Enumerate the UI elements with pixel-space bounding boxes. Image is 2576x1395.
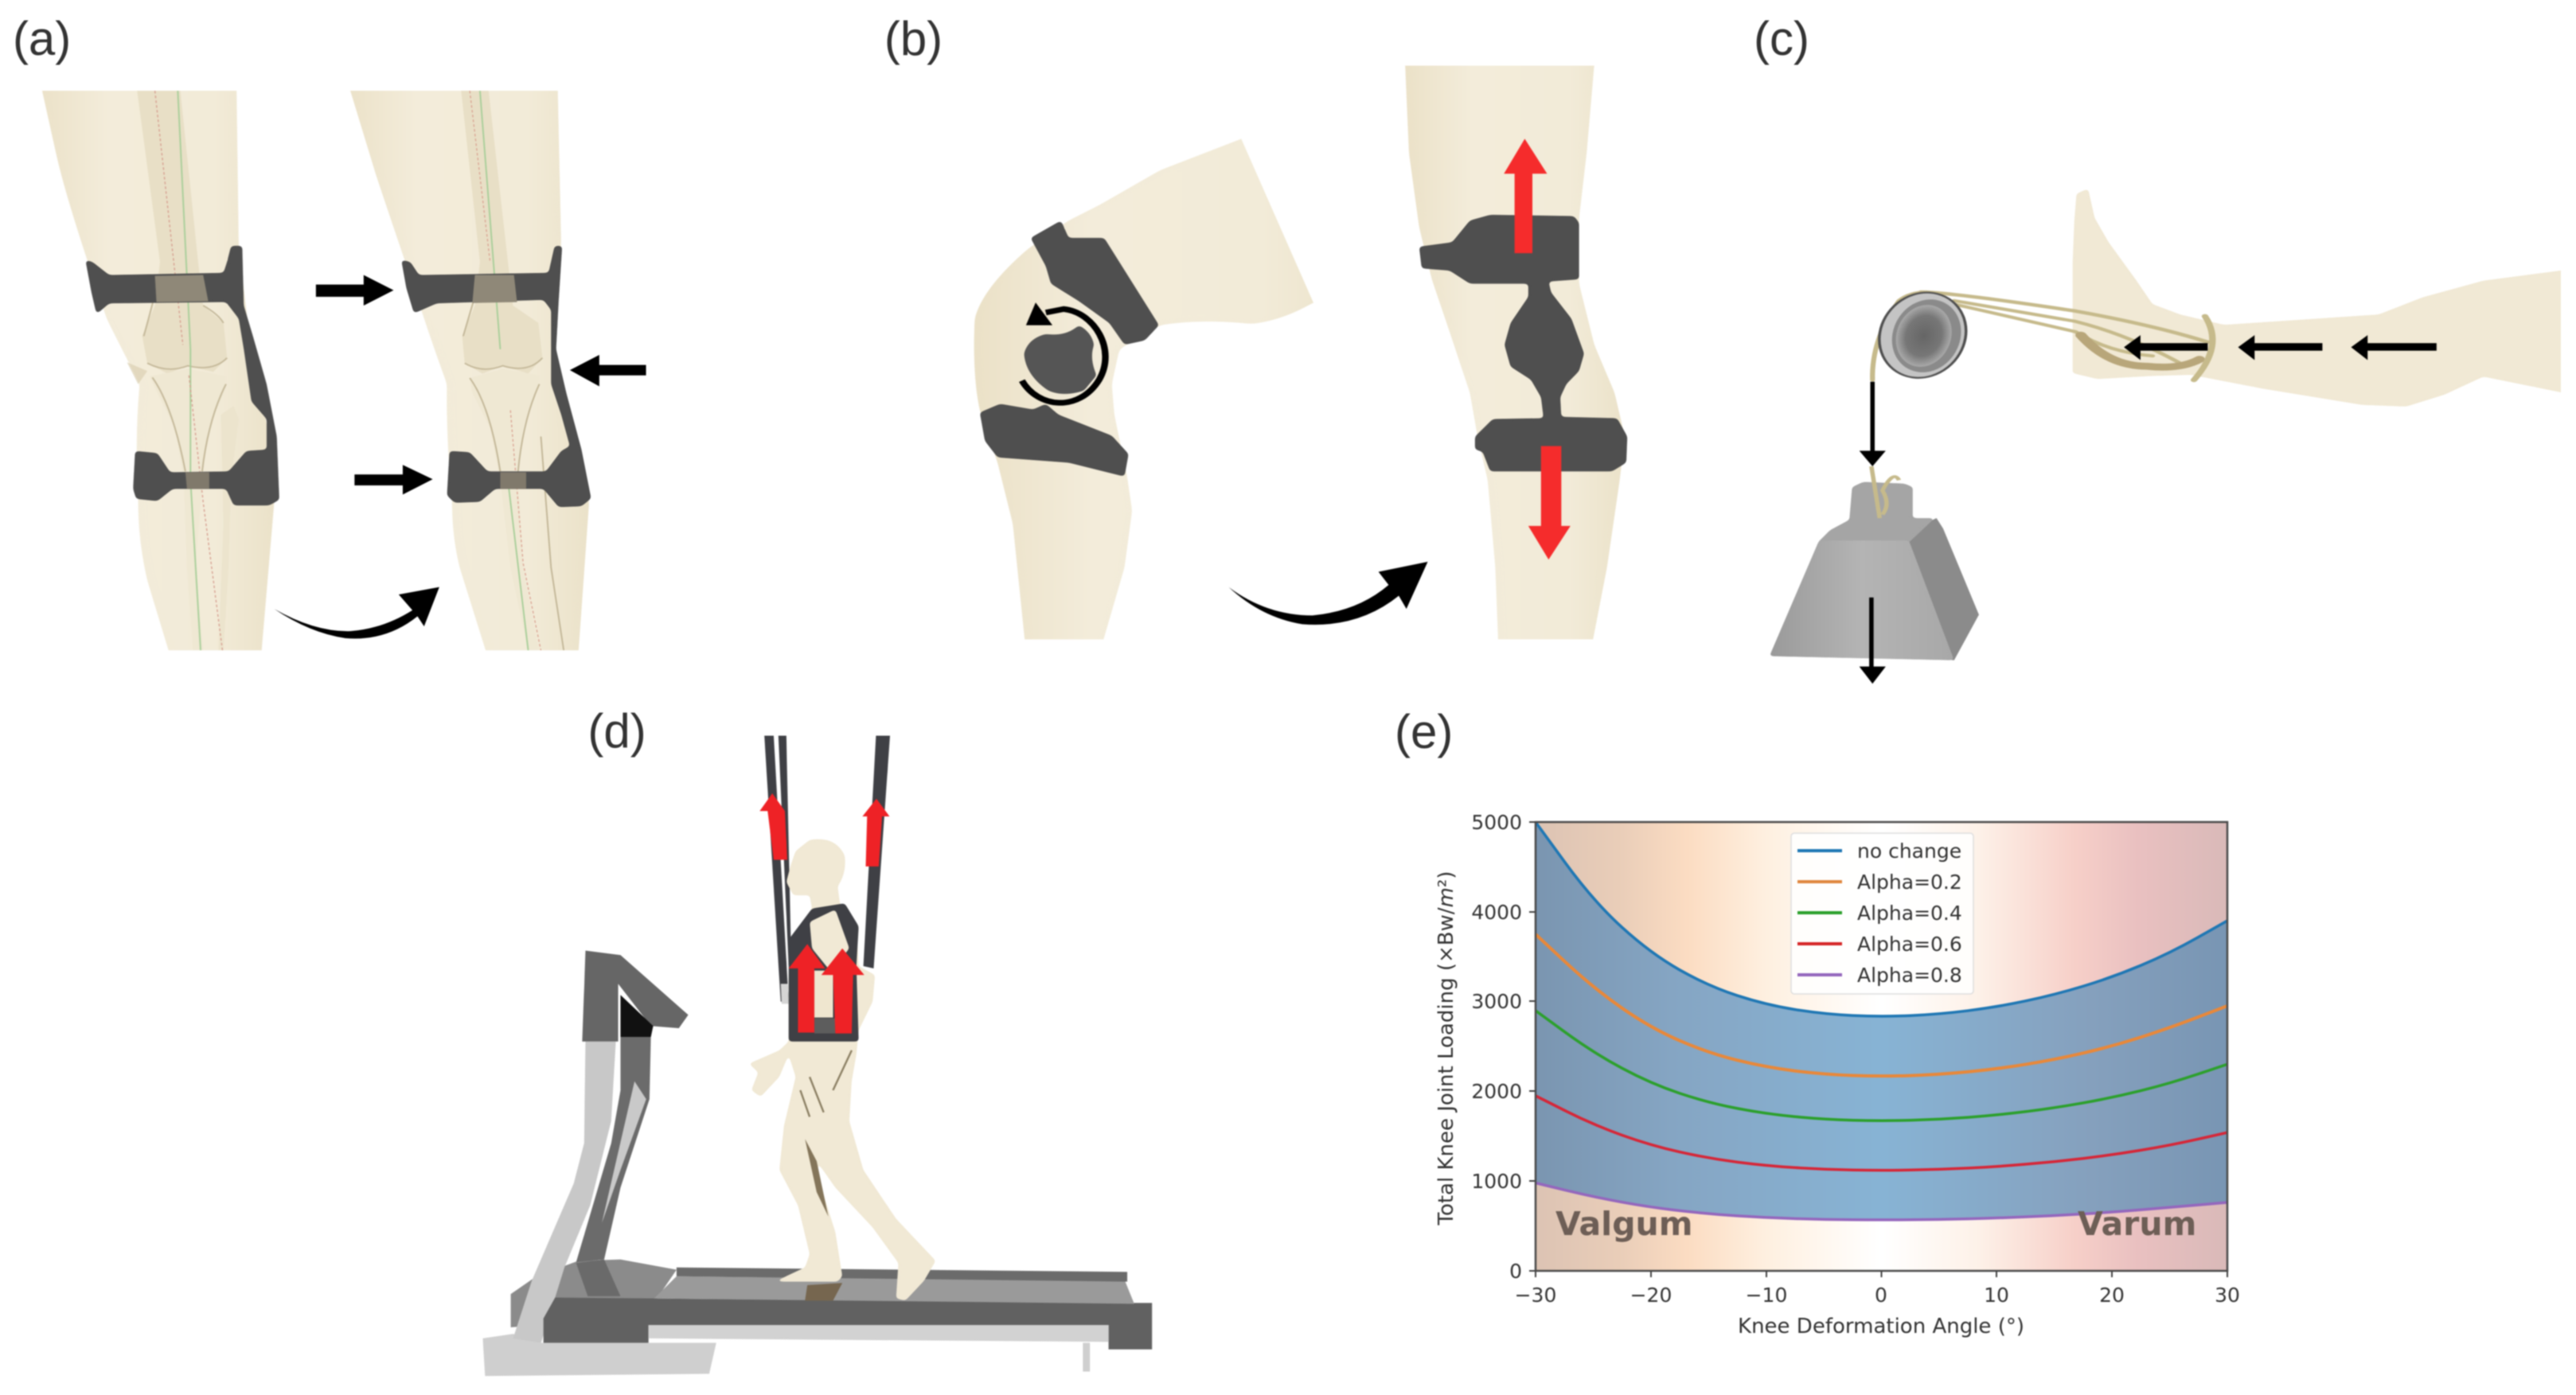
label (b): (b) xyxy=(884,12,943,65)
panel (b): unloading brace xyxy=(884,12,1627,672)
y axis ticks and labels: 0 xyxy=(1509,1260,1522,1283)
right leg xyxy=(350,90,591,651)
legend: no change xyxy=(1857,840,1961,863)
panel (c): leg traction with weight xyxy=(1770,189,2576,684)
curve: alpha 0.6 xyxy=(1536,1096,2227,1171)
arrow: weight down xyxy=(1860,598,1886,684)
left leg bones xyxy=(127,91,239,650)
treadmill xyxy=(482,951,1152,1376)
y axis ticks and labels: 3000 xyxy=(1471,990,1522,1013)
y axis ticks and labels: 1000 xyxy=(1471,1170,1522,1193)
arrow: push right, lower xyxy=(354,465,433,494)
arrows: traction along leg xyxy=(2124,335,2437,360)
y axis ticks and labels xyxy=(1471,811,1536,1283)
x axis ticks and labels xyxy=(1515,1271,2240,1307)
weight xyxy=(1770,466,1979,660)
curve: no change xyxy=(1536,822,2227,1016)
red arrows on torso xyxy=(789,944,865,1034)
lower leg and foot xyxy=(2073,189,2576,407)
straight leg brace xyxy=(1419,215,1627,471)
right brace straps xyxy=(401,246,591,507)
arrow: push right, upper xyxy=(316,275,393,306)
label (a): (a) xyxy=(13,12,71,65)
red arrow up xyxy=(1504,138,1547,253)
axes frame xyxy=(1536,822,2227,1271)
curved arrow b xyxy=(1228,562,1428,625)
left brace straps xyxy=(85,246,279,505)
x axis ticks and labels: 20 xyxy=(2099,1284,2125,1307)
red arrows on cables xyxy=(759,793,889,867)
right leg bones xyxy=(461,91,564,650)
curve: alpha 0.4 xyxy=(1536,1011,2227,1120)
label (d): (d) xyxy=(587,704,646,758)
bent leg straps and hinge xyxy=(980,220,1159,477)
panel (d): body weight support on treadmill xyxy=(482,704,1152,1376)
legend xyxy=(1791,833,1973,994)
y axis title: Total Knee Joint Loading (×Bw/m²) xyxy=(1434,871,1458,1226)
arrow: push left, knee xyxy=(570,355,646,386)
y axis ticks and labels: 2000 xyxy=(1471,1080,1522,1103)
y axis ticks and labels: 5000 xyxy=(1471,811,1522,834)
arrow: rope tension down xyxy=(1860,382,1886,466)
traction rope xyxy=(1872,292,2212,380)
circular rotation arrow xyxy=(1022,302,1106,403)
legend: Alpha=0.2 xyxy=(1857,871,1962,894)
curve: alpha 0.8 xyxy=(1536,1183,2227,1220)
y axis ticks and labels: 4000 xyxy=(1471,901,1522,924)
curve: alpha 0.2 xyxy=(1536,934,2227,1076)
support cables xyxy=(764,736,890,1003)
x axis ticks and labels: −20 xyxy=(1630,1284,1672,1307)
legend: Alpha=0.6 xyxy=(1857,933,1962,956)
straight leg xyxy=(1404,65,1623,640)
shaded band xyxy=(1536,822,2227,1220)
legend: Alpha=0.4 xyxy=(1857,902,1962,925)
harness vest xyxy=(789,903,859,1042)
label (e): (e) xyxy=(1395,705,1453,758)
x axis ticks and labels: −30 xyxy=(1515,1284,1556,1307)
red arrow down xyxy=(1528,446,1571,559)
panel (e): knee joint loading chart xyxy=(1395,705,2240,1338)
walking person xyxy=(749,839,936,1300)
legend: Alpha=0.8 xyxy=(1857,964,1962,987)
x axis ticks and labels: 30 xyxy=(2215,1284,2240,1307)
bent leg xyxy=(974,138,1313,640)
region label Varum: Varum xyxy=(2078,1205,2196,1243)
region label Valgum: Valgum xyxy=(1555,1205,1692,1243)
x axis ticks and labels: 0 xyxy=(1875,1284,1887,1307)
plot background xyxy=(1536,822,2227,1271)
x axis ticks and labels: 10 xyxy=(1984,1284,2009,1307)
x axis ticks and labels: −10 xyxy=(1746,1284,1787,1307)
curved arrow a xyxy=(275,587,439,638)
panel (a): knee brace valgus correction xyxy=(13,12,646,681)
label (c): (c) xyxy=(1754,12,1809,65)
left leg xyxy=(41,90,280,651)
x axis title: Knee Deformation Angle (°) xyxy=(1738,1315,2024,1338)
pulley xyxy=(1873,290,1973,380)
